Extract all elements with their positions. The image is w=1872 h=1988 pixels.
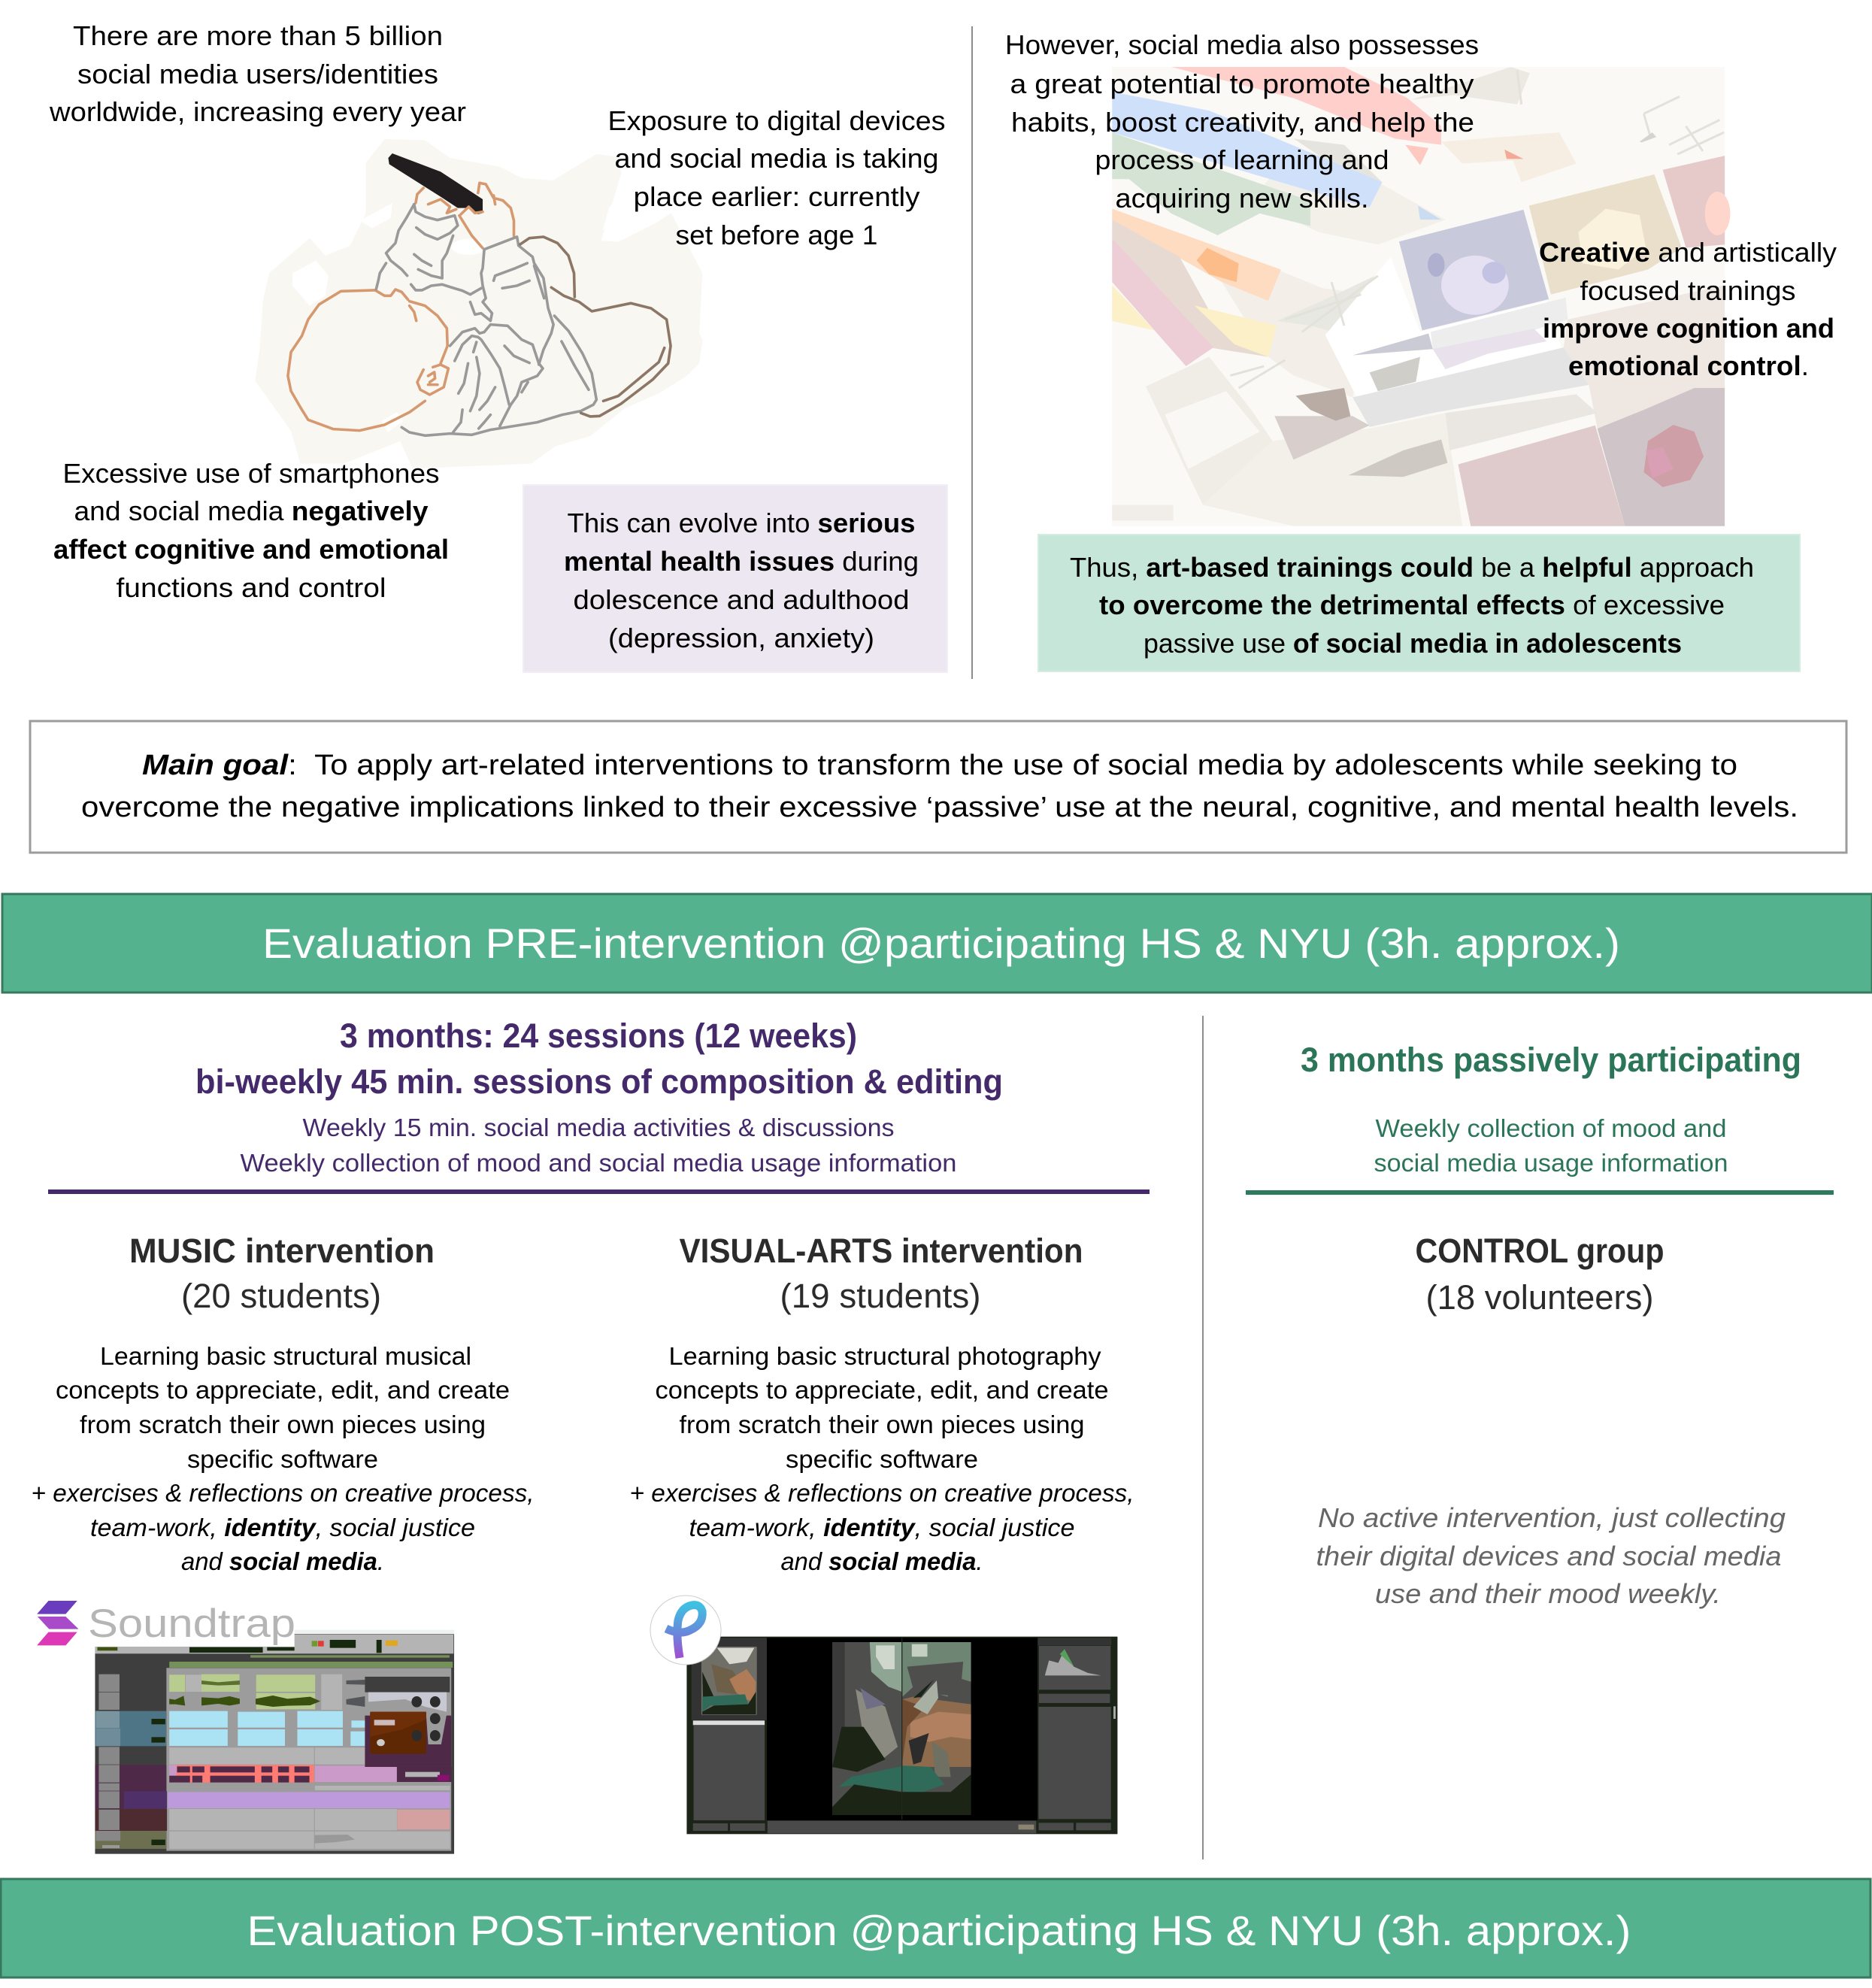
text: excessive use: affect cognitive and emotional [53,534,449,565]
text: users worldwide: There are more than 5 billion [73,20,443,51]
text: music description: Learning basic structural musical [100,1342,471,1370]
text: visual arts description: concepts to appreciate, edit, and create [656,1376,1108,1404]
text: potential of social media: acquiring new skills. [1116,183,1368,214]
heading: intervention schedule: bi-weekly 45 min. sessions of composition & editing [195,1062,1003,1101]
text: music description: specific software [187,1445,378,1473]
text: creative trainings: Creative and artistically [1539,237,1837,268]
banner: evaluation post-intervention: Evaluation POST-intervention @participating HS & NYU (3h. approx.) [247,1907,1631,1954]
text: visual arts description: from scratch their own pieces using [680,1411,1084,1438]
text: potential of social media: a great potential to promote healthy [1010,68,1474,99]
text: excessive use [53,458,449,603]
callout: mental health issues: mental health issues during [564,546,919,577]
heading: music: MUSIC intervention [129,1232,435,1270]
panel: potential of art-based training [1005,29,1837,671]
screenshot: music editing software [23,1579,454,1854]
text: visual arts description [630,1342,1134,1575]
banner: evaluation post-intervention [1,1879,1870,1977]
panel: intervention groups [23,1017,1150,1854]
text: earlier exposure: and social media is taking [615,143,938,174]
heading: music: (20 students) [181,1277,381,1315]
callout: mental health issues: dolescence and adulthood [573,584,910,615]
text: music description: and social media. [181,1547,384,1575]
text: excessive use: functions and control [116,572,386,603]
heading: intervention schedule [48,1017,1150,1194]
text: potential of social media: process of learning and [1095,144,1389,175]
text: earlier exposure: set before age 1 [675,220,878,250]
column: visual-arts intervention [630,1232,1134,1834]
text: earlier exposure: place earlier: currently [633,181,920,212]
text: users worldwide [49,20,466,127]
text: potential of social media [1005,29,1479,214]
heading: music [129,1232,435,1315]
heading: intervention schedule: Weekly collection of mood and social media usage information [241,1149,956,1177]
text: users worldwide: social media users/identities [77,59,438,89]
text: music description: concepts to appreciate, edit, and create [56,1376,510,1404]
callout: art-based trainings: to overcome the detrimental effects of excessive [1099,589,1725,620]
text: creative trainings [1539,237,1837,381]
text: creative trainings: focused trainings [1580,275,1795,306]
illustration: faded art collage [1112,67,1730,526]
panel: main goal [30,721,1846,853]
heading: control schedule [1246,1041,1834,1195]
text: music description: + exercises & reflections on creative process, [32,1479,535,1507]
text: control note: use and their mood weekly. [1375,1578,1721,1609]
heading: visual arts: VISUAL-ARTS intervention [680,1232,1083,1270]
heading: control group: CONTROL group [1415,1232,1665,1270]
column: music intervention [23,1232,535,1854]
text: control note: No active intervention, just collecting [1318,1502,1786,1533]
callout: mental health issues [523,485,947,672]
callout: art-based trainings: Thus, art-based trainings could be a helpful approach [1070,552,1754,583]
text: creative trainings: emotional control. [1568,350,1809,381]
heading: visual arts [680,1232,1083,1315]
callout: art-based trainings [1038,535,1800,671]
heading: control schedule: Weekly collection of mood and [1376,1114,1726,1142]
callout: mental health issues: (depression, anxiety) [608,623,874,653]
text: earlier exposure [607,105,946,250]
illustration: baby holding smartphone [255,139,714,468]
text: users worldwide: worldwide, increasing every year [49,96,466,127]
text: creative trainings: improve cognition and [1543,313,1834,344]
label: Soundtrap: Soundtrap [88,1602,295,1646]
text: excessive use: Excessive use of smartphones [63,458,439,489]
callout: mental health issues: This can evolve into serious [567,508,916,538]
icon: photo app logo [650,1596,721,1665]
heading: control group [1415,1232,1665,1317]
text: visual arts description: team-work, identity, social justice [689,1514,1075,1541]
panel: control group [1246,1041,1834,1609]
heading: intervention schedule: 3 months: 24 sessions (12 weeks) [340,1017,857,1055]
panel: main goal: Main goal : To apply art-related interventions to transform the use of social media by adolescents while seeking to [142,750,1737,781]
text: visual arts description: specific software [786,1445,978,1473]
heading: intervention schedule: Weekly 15 min. social media activities & discussions [302,1114,895,1141]
text: visual arts description: Learning basic structural photography [669,1342,1101,1370]
heading: control group: (18 volunteers) [1425,1278,1654,1317]
heading: control schedule: 3 months passively participating [1301,1041,1801,1079]
heading: visual arts: (19 students) [780,1277,980,1315]
panel: problem background [49,20,947,672]
heading: control schedule: social media usage information [1374,1149,1728,1177]
soundtrap logo backing [23,1579,295,1647]
text: excessive use: and social media negatively [74,495,429,526]
screenshot: photo editing software [686,1637,1117,1834]
banner: evaluation pre-intervention: Evaluation PRE-intervention @participating HS & NYU (3h. approx.) [262,920,1620,967]
banner: evaluation pre-intervention [2,894,1872,992]
text: visual arts description: + exercises & reflections on creative process, [630,1479,1134,1507]
text: visual arts description: and social media. [780,1547,983,1575]
callout: art-based trainings: passive use of social media in adolescents [1143,628,1682,659]
text: music description [32,1342,535,1575]
panel: main goal: overcome the negative implications linked to their excessive ‘passive’ use at the neural, cognitive, and mental health levels. [81,792,1798,823]
text: control note: their digital devices and social media [1316,1541,1782,1571]
text: potential of social media: However, social media also possesses [1005,29,1479,60]
text: earlier exposure: Exposure to digital devices [607,105,946,136]
text: music description: from scratch their own pieces using [80,1411,486,1438]
text: potential of social media: habits, boost creativity, and help the [1011,107,1474,138]
text: music description: team-work, identity, social justice [90,1514,475,1541]
text: control note [1316,1502,1786,1609]
